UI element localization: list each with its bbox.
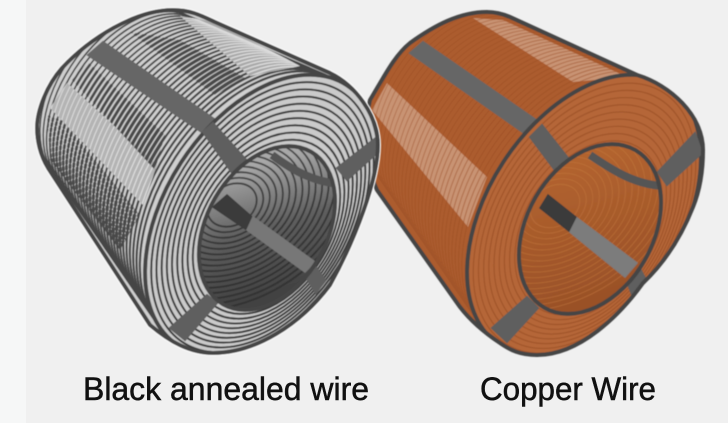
- copper coil hole: [490, 119, 690, 339]
- grey dark band upper: [131, 32, 245, 95]
- grey upper highlight windings: [180, 16, 300, 76]
- grey inner strap shadow: [213, 195, 252, 230]
- copper barrel highlights: [372, 18, 627, 227]
- grey coil outline: [37, 10, 378, 353]
- grey barrel strap: [88, 42, 220, 133]
- copper hole interior: [522, 152, 658, 309]
- copper face straps: [492, 125, 702, 342]
- grey dark band middle: [72, 63, 166, 170]
- label: copper wire: Copper Wire: [480, 371, 656, 407]
- left margin strip: [0, 0, 26, 423]
- copper hole outline: [490, 119, 690, 339]
- label: black annealed wire: Black annealed wire: [83, 371, 369, 407]
- grey hole outline: [171, 122, 363, 334]
- grey face rings: [150, 80, 376, 352]
- copper inner strap shadow: [540, 195, 577, 232]
- illustration: copper wire coil: [367, 9, 706, 358]
- grey hole interior: [200, 148, 334, 306]
- copper coil outline: [360, 12, 703, 355]
- grey highlight windings: [50, 84, 154, 205]
- copper hole windings: [522, 158, 658, 309]
- grey coil body: [37, 10, 378, 353]
- copper inner curved strap: [590, 155, 662, 186]
- copper wire windings: [372, 18, 616, 311]
- grey barrel windings: [38, 11, 328, 319]
- grey coil hole: [171, 122, 363, 334]
- copper face rings: [472, 82, 696, 354]
- grey upper highlight: [180, 16, 300, 76]
- copper coil body: [360, 12, 703, 355]
- grey inner strap: [247, 217, 315, 272]
- copper face rim: [464, 72, 702, 331]
- grey face rim: [142, 72, 376, 340]
- copper inner strap: [570, 218, 637, 277]
- grey barrel detail: [38, 11, 377, 352]
- grey hole windings: [200, 148, 334, 306]
- grey coil front face: [152, 120, 220, 338]
- grey coil halo: [37, 10, 378, 353]
- grey face straps: [170, 123, 377, 340]
- copper barrel strap: [410, 42, 539, 135]
- grey barrel highlight: [50, 83, 157, 205]
- copper barrel detail: [372, 18, 702, 352]
- grey inner curved strap: [272, 155, 340, 184]
- copper coil front face: [469, 77, 698, 352]
- grey dark band lower: [46, 115, 139, 250]
- illustration: black annealed wire coil: [34, 8, 382, 356]
